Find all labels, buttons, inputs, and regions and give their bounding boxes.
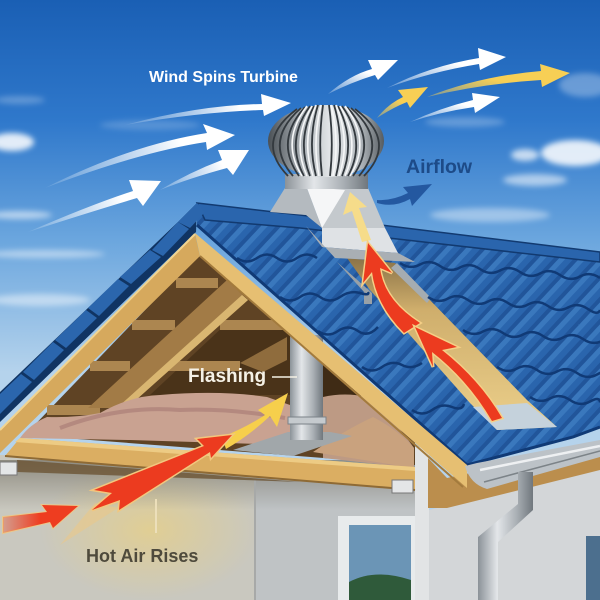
eave vent left xyxy=(0,462,17,475)
flashing pipe xyxy=(233,335,352,456)
arrow: exhaust yellow 1 xyxy=(377,87,428,118)
roof purlins xyxy=(47,283,288,410)
insulation xyxy=(20,393,414,468)
arrow: roof red upper xyxy=(363,243,420,333)
gable boards xyxy=(0,233,467,488)
second brace xyxy=(240,337,287,372)
label: Hot Air Rises xyxy=(86,499,198,566)
turbine dome xyxy=(268,105,384,177)
small window right xyxy=(586,536,600,600)
house wall xyxy=(0,447,600,600)
tile rows xyxy=(197,225,600,465)
arrow: white wind arrow 2 xyxy=(125,94,291,125)
arrow: exhaust white 2 xyxy=(387,48,506,88)
roof tiles main plane xyxy=(197,203,600,465)
attic interior xyxy=(25,255,415,465)
wood fascia right xyxy=(428,445,600,508)
label: Flashing: Flashing xyxy=(188,366,266,387)
eave vent right xyxy=(392,480,413,493)
arrow: left white wind arrow 1 xyxy=(45,124,235,188)
clouds xyxy=(0,73,600,306)
arrow: roof red lower xyxy=(415,327,502,421)
arrow: white wind arrow 3 xyxy=(28,180,161,232)
arrow: exhaust white 1 xyxy=(328,60,398,94)
arrow: attic red main xyxy=(60,435,232,545)
left roof tiles xyxy=(0,203,205,422)
downspout xyxy=(478,472,533,600)
roof opening with exposed deck xyxy=(337,258,557,430)
arrow: roof yellow up xyxy=(343,192,371,242)
ridge cap xyxy=(197,203,600,262)
arrow: attic yellow xyxy=(222,393,288,449)
gutter xyxy=(465,440,600,489)
diagonal brace xyxy=(88,280,248,408)
attic floor beam xyxy=(5,438,415,490)
turbine base xyxy=(270,174,415,262)
label: Hot Air Rises: Hot Air Rises xyxy=(86,546,198,566)
arrow: exhaust yellow 2 xyxy=(427,64,570,97)
label: Airflow: Airflow xyxy=(406,156,473,178)
arrow: exhaust white 3 xyxy=(410,93,500,122)
arrow: attic red low xyxy=(3,505,78,533)
label: Wind Spins Turbine: Wind Spins Turbine xyxy=(149,69,298,86)
arrow: airflow blue xyxy=(377,184,432,206)
window xyxy=(338,516,415,600)
arrow: white wind arrow 4 xyxy=(160,150,249,190)
